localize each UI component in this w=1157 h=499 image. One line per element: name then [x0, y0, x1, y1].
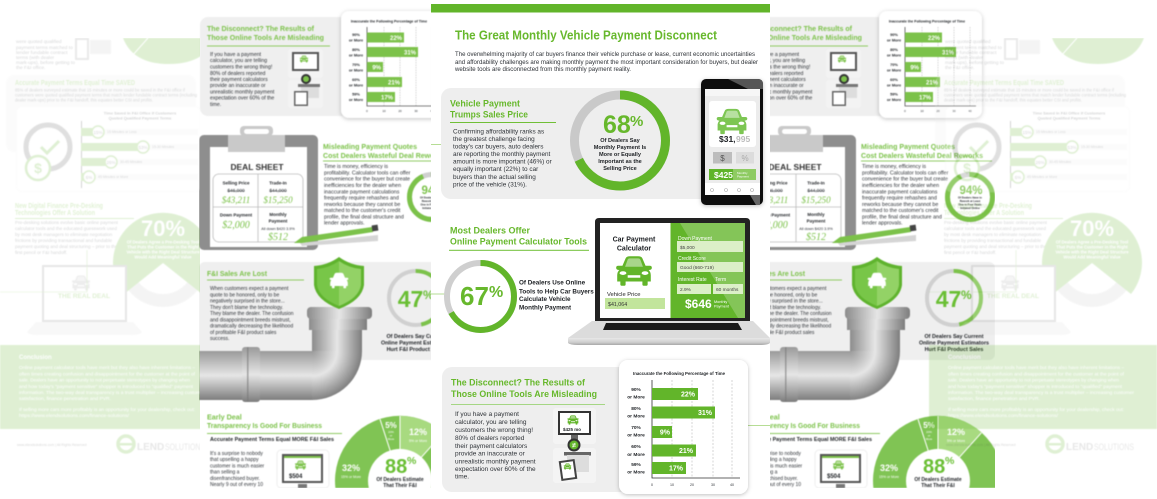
text block: online tools [519, 280, 594, 312]
text block: pre-desking: by most desk managers to eliminate negotiation [15, 232, 113, 237]
panel: the disconnect: provide an inaccurate or [455, 450, 526, 458]
text block: pre-desking: calculator tools and the educated guesswork used [15, 226, 117, 231]
panel: vehicle payment trumps sales price [441, 88, 713, 199]
text block: misleading payment quotes: lender approvals. [324, 220, 365, 226]
text block: fragment: mark-ups), before getting to [16, 60, 75, 66]
text block: pre-desking: payment quoting and deal structuring – prior to the [15, 244, 118, 249]
text block: online tools: Tools to Help Car Buyers [519, 288, 594, 296]
pie: 70% [113, 213, 213, 300]
donut: 68%: Monthly Payment Is [594, 145, 646, 151]
icon: monitor $504: $504 [289, 474, 303, 480]
text block: misleading payment quotes: Time is money, efficiency is [324, 164, 388, 170]
text block: early deal transparency: It's a surprise to nobody [210, 451, 263, 457]
pie fragment [123, 38, 215, 65]
illustration: laptop payment calculator: Calculator [617, 246, 651, 252]
footer and logo: www.elendsolutions.com | All Rights Reserved [17, 443, 87, 447]
icon: monitor $504 [277, 450, 329, 488]
bar chart card (small): or More [349, 38, 364, 42]
card: time saved chart: 6% [86, 175, 92, 180]
donut: 94%: Rework at Least [422, 199, 442, 203]
bar chart: inaccurate percentage of time: or More [627, 452, 645, 458]
panel: the disconnect (small): expectation over 60% of the [210, 96, 274, 102]
pie chart: 88%: 5% or More [409, 439, 427, 443]
text block: early deal transparency: that upselling a happy [210, 457, 259, 463]
intro paragraph [454, 51, 758, 73]
card: time saved chart [16, 106, 201, 192]
card: time saved chart: 15% [93, 130, 103, 135]
bar chart: inaccurate percentage of time: 0 [651, 483, 653, 487]
text block: pre-desking [15, 203, 134, 255]
intro paragraph: and affordability challenges are making monthly payment the most important consideration for buyers, but dealer [455, 59, 758, 66]
illustration: laptop payment calculator: $5,000 [680, 245, 695, 251]
footer and logo: SOLUTIONS [165, 442, 205, 453]
panel: the disconnect (small): customers the wrong thing! [210, 64, 272, 70]
text block: misleading payment quotes: profile, the final deal structure and [324, 214, 404, 220]
panel: blurred right neighbouring slide (same content, offset) [770, 10, 995, 488]
bar chart: inaccurate percentage of time: 22% [681, 392, 696, 398]
panel: vehicle payment trumps sales price: price of the vehicle (31%). [453, 182, 527, 188]
panel: the disconnect: customers the wrong thing! [455, 427, 533, 434]
bar chart: inaccurate percentage of time: 30 [711, 483, 715, 487]
heading: most dealers offer [449, 226, 589, 251]
illustration: laptop payment calculator: $41,064 [608, 302, 627, 308]
bar chart card (small) [341, 11, 444, 118]
illustration: laptop payment calculator: Down Payment [678, 236, 713, 242]
illustration: smartphone: Monthly [737, 171, 748, 175]
bar chart: inaccurate percentage of time: 60% [631, 444, 642, 450]
panel: faded far-right slide (same content, offset) [929, 38, 1157, 453]
donut: 68%: % [630, 113, 643, 130]
text block: online tools: Calculate Vehicle [519, 296, 571, 303]
bar chart: inaccurate percentage of time [619, 360, 748, 494]
bar chart card (small): 90% [352, 32, 360, 37]
donut: 67%: % [489, 284, 503, 301]
card: time saved chart: 53% [138, 145, 148, 150]
pie chart: 88%: That Their F&I [383, 483, 417, 489]
icon: pencil [294, 225, 378, 246]
bar chart card (small): Inaccurate the Following Percentage of Time [351, 20, 427, 24]
donut: 68% [574, 95, 666, 186]
icon: monitor not equal contract: $425 mo [563, 427, 581, 432]
text block: early deal transparency: customer is much easier [210, 464, 265, 470]
icon: deal sheet clipboard: $512 [268, 232, 288, 243]
illustration: laptop payment calculator: Credit Score [678, 256, 706, 262]
donut: 68%: Selling Price [603, 166, 637, 172]
illustration: laptop payment calculator: Good (660-719) [680, 265, 714, 271]
bar chart card (small): 31% [404, 50, 417, 56]
panel: the disconnect: expectation over 60% of the [455, 466, 536, 473]
icon: deal sheet clipboard [199, 126, 318, 250]
text block: fragment: payment terms matched to [16, 45, 73, 51]
bar chart: inaccurate percentage of time: or More [627, 414, 645, 420]
bar chart card (small): 20 [398, 109, 402, 113]
panel: the disconnect: The Disconnect? The Results of [451, 378, 586, 388]
icon: deal sheet clipboard: $46,000 [227, 188, 245, 194]
donut: 68%: Important as the [598, 159, 642, 165]
pie chart: 88%: 5% [385, 421, 397, 430]
panel: the disconnect: 80% of dealers reported [455, 435, 525, 442]
card: time saved chart: Quoted Qualified Payment Terms [109, 116, 172, 120]
pie: 70%: That Puts the Customer in the Right [127, 244, 199, 250]
bar chart card (small): 60% [352, 77, 360, 82]
donut: 94%: Initiated Online [422, 206, 442, 210]
panel: F&I sales are lost [199, 262, 457, 360]
panel: vehicle payment trumps sales price: are reporting the monthly payment [453, 151, 551, 158]
panel: conclusion [0, 345, 228, 429]
bar chart card (small): 80% [352, 47, 360, 52]
illustration: smartphone: 995 [736, 134, 750, 144]
panel: F&I sales are lost: Of Dealers Say Current [386, 334, 446, 340]
icon: deal sheet clipboard: DEAL SHEET [230, 163, 284, 172]
donut: 68%: More or Equally [599, 152, 642, 158]
donut: 94%: One in Four Deals [420, 202, 444, 206]
panel: conclusion: sale. Dealers have an opportunity to not perpetuate stereotypes by changing when [19, 378, 190, 382]
panel: F&I sales are lost: When customers expect a payment [210, 286, 289, 292]
text block: pre-desking: New Digital Finance Pre-Desking [15, 203, 103, 210]
icon: monitor not equal contract: ≠ [572, 442, 576, 450]
bar chart card (small): 17% [381, 96, 394, 102]
panel: the disconnect: time. [455, 474, 469, 480]
panel: centre slide [431, 0, 770, 499]
panel: the disconnect (small): unrealistic monthly payment [210, 90, 275, 96]
bar chart card (small): 22% [390, 36, 403, 42]
panel: vehicle payment trumps sales price: equally important (22%) to car [453, 166, 539, 173]
text block: online tools: Monthly Payment [519, 304, 572, 312]
pie chart: 88%: 88 [385, 456, 407, 478]
donut: 67%: 67 [460, 281, 489, 311]
text block: fragment: were quoted qualified [16, 39, 62, 45]
intro paragraph: The overwhelming majority of car buyers finance their vehicle purchase or lease, current economic uncertainties [455, 51, 755, 58]
panel: accurate payment terms: Accurate Payment Terms Equal Time SAVED [15, 80, 135, 87]
icon: deal sheet clipboard: All down $420 3.9% [261, 227, 295, 231]
illustration: laptop payment calculator: Car Payment [613, 236, 656, 244]
text block: fragment: lender fundable contract [16, 50, 68, 56]
panel: F&I sales are lost: dramatically decreasing the likelihood [210, 324, 293, 330]
icon: deal sheet clipboard: $2,000 [222, 220, 250, 231]
bar chart: inaccurate percentage of time: 21% [679, 448, 694, 455]
panel: accurate payment terms: 85% of dealers surveyed estimate that 15 minutes or more could be saved in the F&I office if [15, 88, 186, 92]
panel: blurred left neighbouring slide [199, 10, 431, 488]
illustration: laptop real deal [0, 250, 142, 335]
panel: F&I sales are lost: F&I Sales Are Lost [207, 269, 267, 278]
text block: misleading payment quotes: Cost Dealers Wasteful Deal Reworks [323, 153, 445, 160]
connector line [431, 144, 441, 145]
icon: green shield with car [314, 257, 364, 309]
text block: misleading payment quotes: Misleading Payment Quotes [323, 144, 417, 151]
text block: pre-desking: Pre-desking solutions evolve basic online payment [15, 220, 119, 225]
icon: deal sheet clipboard: Payment [269, 218, 288, 224]
bar chart: inaccurate percentage of time: 40 [730, 483, 734, 487]
text block: fragment: terms (with dealer [16, 55, 55, 61]
icon: deal sheet clipboard: $44,000 [269, 188, 287, 194]
panel: conclusion: and how today's "payment sensitive" shopper is introduced to "qualified" payment [19, 384, 194, 389]
text block: pre-desking: frictions by providing transactional and fundable [15, 238, 112, 243]
panel: conclusion: Online payment calculator tools have merit but they also have inherent limitations – [19, 365, 195, 370]
bar chart: inaccurate percentage of time: 59% [631, 462, 642, 468]
heading: most dealers offer: Most Dealers Offer [450, 226, 530, 236]
pie: 70%: 70% [141, 216, 185, 241]
panel: conclusion: information. The two-way deal transparency is a trust multiplier – increasing customer [19, 390, 205, 395]
panel: the disconnect (small): time. [210, 102, 221, 108]
illustration: smartphone [701, 79, 763, 205]
bar chart: inaccurate percentage of time: Inaccurate the Following Percentage of Time [633, 371, 726, 376]
text block: early deal transparency: Nearly 9 out of every 10 [210, 482, 263, 488]
text block: fragment: the F&I office. [16, 65, 46, 71]
illustration: smartphone: $ [720, 154, 725, 163]
panel: the disconnect (small): If you have a payment [210, 52, 262, 58]
text block: early deal transparency: disenfranchised buyer. [210, 476, 260, 482]
bar chart: inaccurate percentage of time: 9% [660, 430, 671, 436]
panel: vehicle payment trumps sales price: the greatest challenge facing [453, 136, 535, 143]
illustration: smartphone: Payment [737, 174, 749, 178]
panel: vehicle payment trumps sales price: today's car buyers, auto dealers [453, 144, 543, 150]
card: time saved chart: 26% [106, 160, 116, 165]
pie: 70%: Vehicle with the Right Deal Structure [126, 250, 200, 254]
text block: fragment [16, 39, 75, 71]
panel: faded far-left slide [0, 38, 200, 454]
text block: early deal transparency [207, 412, 342, 488]
illustration: laptop payment calculator: Payment [714, 304, 730, 308]
bar chart card (small): 59% [352, 92, 360, 96]
illustration: laptop payment calculator: 2.9% [680, 287, 692, 293]
footer and logo: LEND [137, 442, 164, 453]
panel: accurate payment terms: customers were quoted qualified payment terms that match lender fundable contract terms (including [15, 92, 198, 98]
panel: conclusion: If selling more cars more profitably is an opportunity for your dealership, check out: [19, 407, 195, 412]
panel: the disconnect: If you have a payment [455, 411, 519, 418]
pie: 70%: Of Dealers Agree a Pre-Desking Tool [127, 240, 199, 244]
text block: early deal transparency: than selling a [210, 470, 240, 476]
panel: conclusion: https://www.elendsolutions.com/finance-solutions/ [19, 413, 130, 418]
panel: the disconnect (small): Those Online Tools Are Misleading [207, 35, 324, 42]
panel: the disconnect (small) [200, 17, 360, 116]
pie chart: 88% [335, 416, 465, 489]
panel: F&I sales are lost: % [423, 288, 434, 302]
pie chart: 88%: 15% or More [341, 475, 361, 479]
text block: misleading payment quotes: matched to the customer's credit [324, 208, 401, 214]
illustration: laptop payment calculator: Term [715, 277, 726, 283]
text block: misleading payment quotes [323, 144, 454, 226]
card: time saved chart: $ [34, 160, 42, 176]
panel: vehicle payment trumps sales price: amount is more important (46%) or [453, 158, 553, 166]
panel: the disconnect (small): their payment calculators [210, 77, 268, 83]
illustration: laptop payment calculator [568, 218, 770, 345]
panel: vehicle payment trumps sales price: Confirming affordability ranks as [453, 128, 544, 136]
bar chart card (small): or More [349, 68, 364, 72]
pie chart: 88%: 20% [388, 430, 394, 434]
donut: 68%: 68 [603, 111, 631, 139]
panel: accurate payment terms [6, 75, 198, 152]
bar chart: inaccurate percentage of time: 70% [631, 425, 642, 431]
card: time saved chart: 45 Minutes or More [98, 175, 128, 179]
icon: deal sheet clipboard: Monthly [269, 212, 287, 217]
heading: most dealers offer: Online Payment Calculator Tools [450, 236, 587, 246]
panel: F&I sales are lost: Online Payment Estimators [381, 340, 451, 346]
pie chart: 88%: More [388, 437, 395, 441]
illustration: smartphone: $425 [714, 170, 733, 180]
panel: conclusion: Conclusion [19, 355, 52, 361]
icon: monitor not equal contract [553, 408, 596, 483]
bar chart: inaccurate percentage of time: 31% [698, 410, 713, 417]
illustration: grey pipe [199, 307, 372, 402]
text block: misleading payment quotes: inaccurate payment calculations [324, 190, 400, 196]
bar chart card (small): or More [349, 97, 364, 102]
icon: deal sheet clipboard: $15,250 [263, 195, 293, 205]
donut: 68%: Of Dealers Say [600, 138, 641, 144]
pie chart: 88%: or [390, 434, 392, 438]
pie chart: 88%: 12% [409, 427, 427, 437]
icon: deal sheet clipboard: Selling Price [222, 180, 250, 186]
footer and logo [17, 436, 205, 453]
icon: deal sheet clipboard: Down Payment [220, 212, 253, 218]
text block: online tools: Of Dealers Use Online [519, 280, 586, 286]
bar chart card (small): 40 [430, 109, 434, 113]
text block: early deal transparency: Accurate Payment Terms Equal MORE F&I Sales [210, 437, 334, 443]
panel: the disconnect: Those Online Tools Are Misleading [451, 389, 597, 399]
illustration: smartphone: $31, [719, 134, 736, 144]
text block: early deal transparency: Early Deal [207, 412, 242, 422]
panel: the disconnect [442, 367, 642, 492]
donut: 67% [431, 263, 514, 330]
panel: the disconnect: unrealistic monthly payment [455, 458, 536, 466]
panel: the disconnect (small): 80% of dealers reported [210, 71, 265, 77]
pie chart: 88%: % [407, 455, 417, 467]
card: time saved chart: 15-30 Minutes [152, 145, 174, 149]
bar chart: inaccurate percentage of time: 10 [670, 483, 674, 487]
illustration: laptop payment calculator: Vehicle Price [607, 292, 641, 298]
bar chart card (small): 0 [366, 109, 368, 113]
bar chart: inaccurate percentage of time: or More [627, 432, 645, 438]
donut: 94%: 94% [421, 185, 445, 197]
card: time saved chart: 30-45 Minutes [120, 160, 142, 164]
donut: 94%: Of Dealers Have to [420, 196, 444, 200]
bar chart card (small): 10 [382, 109, 386, 113]
panel: vehicle payment trumps sales price: Vehicle Payment [450, 98, 520, 108]
panel: the disconnect: calculator, you are telling [455, 419, 527, 426]
text block: early deal transparency: Transparency Is Good For Business [207, 421, 322, 430]
card: time saved chart: Time Saved In F&I Office If Customers [104, 110, 177, 116]
bar chart card (small): 30 [414, 109, 418, 113]
illustration: smartphone: % [741, 154, 749, 163]
bar chart card (small): 21% [388, 80, 401, 86]
panel: vehicle payment trumps sales price: buyers than the actual selling [453, 174, 536, 181]
bar chart card (small): 70% [352, 62, 360, 67]
bar chart card (small): 9% [372, 66, 382, 72]
icon: contract [75, 38, 111, 60]
panel: the disconnect (small): calculator, you are telling [210, 58, 267, 64]
panel: vehicle payment trumps sales price: Trumps Sales Price [450, 110, 528, 120]
panel: F&I sales are lost: and disappointment breeds mistrust, [210, 318, 291, 324]
bar chart: inaccurate percentage of time: 80% [631, 406, 642, 412]
bar chart card (small): or More [349, 52, 364, 58]
text block: pre-desking: Technologies Offer A Solution [15, 210, 95, 217]
panel: F&I sales are lost: They don't blame the technology. [210, 305, 283, 311]
pie chart: 88%: 32% [342, 463, 360, 473]
panel: accurate payment terms: dealer mark-ups) prior to the F&I handoff, this equates better CSI and profits. [15, 98, 153, 102]
donut: 94% [410, 174, 454, 220]
text block: misleading payment quotes: convenience for the buyer but create [324, 176, 410, 182]
text block: misleading payment quotes: reworks because they cannot be [324, 202, 400, 208]
panel: the disconnect (small): provide an inaccurate or [210, 83, 266, 89]
card: time saved chart: 15 Minutes or Less [107, 130, 137, 134]
panel: F&I sales are lost: of profitable F&I product sales [210, 330, 277, 336]
bar chart: inaccurate percentage of time: or More [627, 394, 645, 400]
text block: misleading payment quotes: profitability. Calculator tools can offer [324, 170, 411, 176]
illustration: laptop payment calculator: 60 months [716, 287, 739, 293]
panel: F&I sales are lost: quote to be honored, only to be [210, 292, 279, 298]
panel: F&I sales are lost: 47 [398, 286, 423, 312]
panel: F&I sales are lost: success. [210, 336, 229, 342]
panel: the disconnect (small): The Disconnect? The Results of [207, 26, 315, 33]
panel: conclusion: often times creating confusion and disappointment for the customer at the point of [19, 372, 196, 376]
pie chart: 88%: Of Dealers Estimate [376, 477, 424, 483]
panel: the disconnect: their payment calculators [455, 443, 528, 450]
text block: misleading payment quotes: frequently require rehashes and [324, 196, 399, 202]
icon: deal sheet clipboard: $43,211 [222, 195, 250, 205]
bar chart: inaccurate percentage of time: or More [627, 470, 645, 476]
top green bar [431, 4, 770, 12]
bar chart: inaccurate percentage of time: 17% [669, 466, 684, 472]
intro paragraph: website tools are disconnected from this monthly payment reality. [454, 66, 631, 73]
bar chart: inaccurate percentage of time: 20 [690, 483, 694, 487]
pie: 70%: Would Add Meaningful Value [134, 254, 192, 260]
panel: conclusion: satisfaction, finance penetration and PVR. [19, 396, 111, 401]
connector line [746, 425, 770, 426]
text block: pre-desking: first pencil or F&I handoff. [15, 250, 67, 255]
bar chart card (small): or More [349, 82, 364, 88]
icon: deal sheet clipboard: Trade-In [269, 180, 287, 186]
panel: F&I sales are lost: negatively surprised in the store... [210, 298, 285, 304]
text block: misleading payment quotes: inefficiencies for the dealer when [324, 183, 401, 189]
illustration: laptop real deal: THE REAL DEAL [58, 293, 110, 300]
illustration: laptop payment calculator: $646 [685, 297, 712, 311]
illustration: laptop payment calculator: Interest Rate [678, 277, 707, 283]
illustration: laptop payment calculator: Monthly [714, 300, 727, 304]
panel: F&I sales are lost: Hurt F&I Product Sales [387, 347, 445, 353]
bar chart: inaccurate percentage of time: 90% [631, 387, 642, 393]
panel: F&I sales are lost: They blame the dealer. The confusion [210, 311, 294, 317]
title: The Great Monthly Vehicle Payment Disconnect [455, 28, 718, 42]
